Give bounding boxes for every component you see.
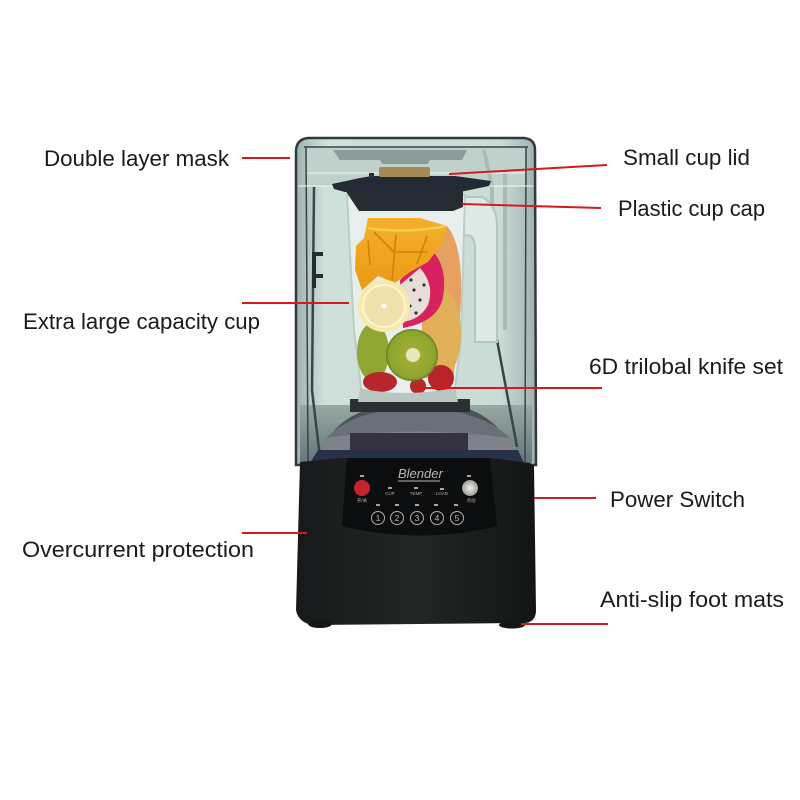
panel: black base (296, 458, 536, 628)
label: extra large capacity cup: Extra large capacity cup (23, 309, 260, 334)
fruit: dragon fruit (400, 250, 444, 328)
indicators: cup temp load: LOAD (436, 491, 449, 496)
indicators: cup temp load (357, 491, 476, 504)
label: overcurrent protection: Overcurrent protection (22, 537, 254, 562)
label: double layer mask: Double layer mask (44, 146, 230, 171)
dome: motor mount (310, 399, 524, 463)
fruit: kiwi slice (386, 329, 438, 381)
panel: control panel (342, 458, 497, 536)
fruit: orange pear (420, 226, 461, 378)
indicators: cup temp load: 点动 (466, 497, 476, 504)
foot mats (308, 620, 332, 628)
fruit: tomatoes (363, 365, 454, 394)
icon: blender jar (332, 167, 497, 402)
label: small cup lid: Small cup lid (623, 145, 750, 170)
panel: control panel: 5 (455, 513, 460, 523)
label: 6D trilobal knife set: 6D trilobal knife set (589, 354, 783, 379)
brand: Blender: Blender (398, 466, 443, 481)
fruit: mango (355, 218, 447, 290)
jar body (347, 195, 465, 396)
label: plastic cup cap: Plastic cup cap (618, 196, 765, 221)
speed buttons 1-5 (372, 512, 464, 524)
fruit: green kiwi skin (357, 323, 389, 381)
indicator lights (360, 476, 471, 505)
indicators: cup temp load: TEMP (410, 491, 422, 496)
callout lines (242, 158, 608, 624)
panel: control panel: 1 (376, 513, 381, 523)
fruit: lemon (358, 280, 410, 332)
plastic cup cap (332, 176, 491, 192)
button: silver pulse (462, 480, 478, 496)
lid seal (345, 190, 463, 211)
panel: control panel: 3 (415, 513, 420, 523)
button: red start (354, 480, 370, 496)
blade base (358, 388, 458, 402)
panel: double layer hood (296, 138, 536, 465)
small cup lid (369, 167, 430, 178)
jar handle (462, 197, 497, 342)
indicators: cup temp load: 开/关 (357, 497, 368, 504)
label: anti-slip foot mats: Anti-slip foot mats (600, 587, 784, 612)
indicators: cup temp load: CUP (385, 491, 395, 496)
panel: control panel: 4 (435, 513, 440, 523)
label: power switch: Power Switch (610, 487, 745, 512)
panel: control panel: 2 (395, 513, 400, 523)
